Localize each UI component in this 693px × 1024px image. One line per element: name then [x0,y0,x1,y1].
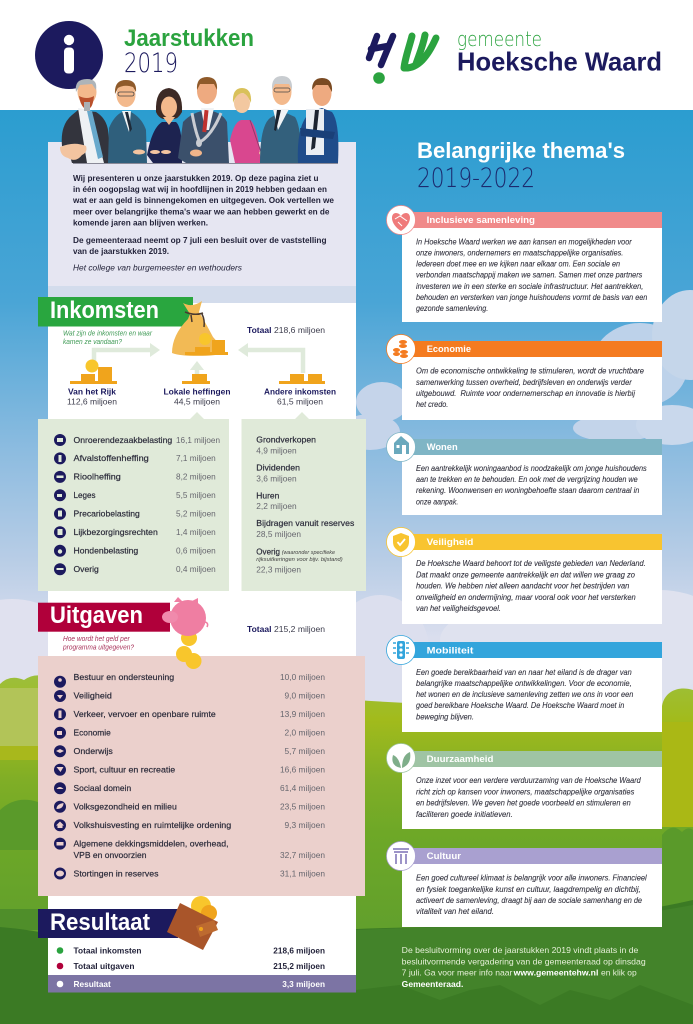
footer note: en klik op [601,968,637,978]
list values: 9,0 miljoen [284,690,325,700]
intro text: in één oogopslag wat wij in hoofdlijnen in 2019 hebben gedaan en [73,184,327,194]
row: totaal uitgaven: 215,2 miljoen [273,961,325,971]
person 7 [298,78,338,163]
intro text: Wij presenteren u onze jaarstukken 2019. Op deze pagina ziet u [73,173,318,183]
list labels: Onroerendezaakbelasting [74,435,173,445]
panel: left white column [48,303,356,992]
card: Cultuur: Cultuur [427,851,461,862]
card: Mobiliteit: belangrijke maatschappelijke ontwikkelingen. Voor de economie, [416,679,632,688]
card: Mobiliteit: Een goede bereikbaarheid van en naar het eiland is de drager van [416,668,632,677]
total expenses: 215,2 miljoen [274,624,325,634]
total income: Totaal [247,325,272,335]
list values: 9,3 miljoen [284,820,325,830]
total expenses [247,624,325,634]
card: Veiligheid: onveiligheid en ondermijning, maar vooral ook voor het versterken [416,593,636,602]
heading: Belangrijke thema's: Belangrijke thema's [417,138,625,163]
list labels: Leges [74,490,96,500]
list labels: Hondenbelasting [74,546,139,556]
list values: 23,5 miljoen [280,802,325,812]
card: Veiligheid: Dat maakt onze gemeente aantrekkelijk en dat willen we graag zo [416,570,636,579]
total expenses: Totaal [247,624,272,634]
row: totaal uitgaven [57,961,325,971]
list values: 2,0 miljoen [284,728,325,738]
person 5 [230,88,269,163]
subheading: Inkomsten question: kamen ze vandaan? [63,337,122,346]
income sources: 61,5 miljoen [277,396,323,406]
icon: column building [386,842,416,870]
card: Cultuur [386,842,662,927]
list icons [54,434,66,575]
list values: 0,6 miljoen [176,546,216,556]
card: Inclusieve samenleving: onze inwoners, ondernemers en maatschappelijke organisaties. [416,248,623,258]
card: Mobiliteit: het wonen en de inclusieve samenleving zetten we ons in voor een [416,690,634,699]
subheading: Uitgaven question [62,634,134,652]
icon: wallet [167,896,218,950]
panel: andere inkomsten: 22,3 miljoen [256,564,301,574]
list labels: Lijkbezorgingsrechten [74,527,158,537]
heading: Resultaat: Resultaat [50,909,150,936]
card: Economie [386,334,662,420]
list values: 13,9 miljoen [280,709,325,719]
hills [0,675,693,1024]
list values: 31,1 miljoen [280,868,325,878]
card: Veiligheid: De Hoeksche Waard behoort tot de veiligste gebieden van Nederland. [416,559,646,568]
list values: 5,2 miljoen [176,509,216,519]
intro text [72,173,334,272]
list labels: Rioolheffing [74,472,121,482]
card: Cultuur: activeert de samenleving, draagt bij aan de sociale samenhang en de [416,896,643,905]
heading: Uitgaven [38,602,170,632]
person 4 [178,77,229,163]
list values: 8,2 miljoen [176,472,216,482]
income sources: Lokale heffingen [164,386,230,396]
subheading: Inkomsten question [63,328,153,346]
sky background [0,110,693,710]
list labels: Overig [74,564,99,574]
list labels: VPB en onvoorzien [74,850,147,860]
card: Inclusieve samenleving: behouden en versterken van jonge huishoudens vormt de basis van een [416,293,648,302]
icon: shield [386,528,416,556]
intro text: komende jaren aan blijven werken. [73,218,208,228]
row: resultaat: Resultaat [74,979,111,989]
card: Wonen: Wonen [427,442,458,453]
heading: Belangrijke thema's [417,138,625,194]
intro text: Het college van burgemeester en wethouders [73,262,242,272]
icon: heart [386,206,416,234]
logo: gemeente Hoeksche Waard [369,27,662,84]
heading: Inkomsten: Inkomsten [50,297,159,324]
income sources: Van het Rijk [68,386,116,396]
footer note: 7 juli. Ga voor meer info naar [402,968,513,978]
income sources: 44,5 miljoen [174,396,220,406]
footer note [402,945,646,989]
card: Mobiliteit: goed bereikbare Hoeksche Waard. De Hoeksche Waard moet in [416,701,625,710]
list labels: Afvalstoffenheffing [74,453,149,463]
list values: 1,4 miljoen [176,527,216,537]
card: Duurzaamheid: richt zich op kansen voor inwoners, maatschappelijke organisaties [416,787,634,796]
person 6 [260,76,302,163]
card: Duurzaamheid: Duurzaamheid [427,754,494,765]
icon: traffic light [386,636,416,664]
list labels: Precariobelasting [74,509,140,519]
list icons [54,676,66,880]
illustration: college members [60,76,338,164]
list labels: Stortingen in reserves [74,868,158,878]
card: Economie: samenwerking tussen overheid, bedrijfsleven en onderwijs verder [416,378,632,387]
card: Wonen: aan te trekken en te behouden. En ook met de vergrijzing houden we [416,475,638,484]
subheading: Uitgaven question: Hoe wordt het geld per [63,634,130,643]
card: Economie: Om de economische ontwikkeling te stimuleren, wordt de vruchtbare [416,366,645,376]
list labels: Algemene dekkingsmiddelen, overhead, [74,839,228,849]
card: Mobiliteit [386,636,662,732]
list labels [74,435,173,574]
card: Economie: Economie [427,344,471,355]
subheading: Inkomsten question: Wat zijn de inkomsten en waar [63,328,153,338]
row: totaal inkomsten: Totaal inkomsten [74,945,142,955]
footer note: Gemeenteraad. [402,979,463,989]
panel: andere inkomsten: Dividenden [256,462,300,472]
card: Inclusieve samenleving: In Hoeksche Waard werken we aan kansen en mogelijkheden voor [416,238,632,246]
result rows [48,945,356,992]
panel: andere inkomsten: 3,6 miljoen [256,473,297,483]
panel: intro [48,142,356,286]
card: Inclusieve samenleving: investeren we in een sterke en sociale infrastructuur. Het aantrekken, [416,282,643,291]
arrows to money bag [94,343,303,376]
footer note: De besluitvorming over de jaarstukken 2019 vindt plaats in de [402,945,639,955]
card: Veiligheid: houden. We hebben niet alleen aandacht voor het bestrijden van [416,582,630,590]
card: Cultuur: vitaliteit van het eiland. [416,907,494,916]
list labels: Economie [74,728,111,738]
list values [176,435,220,574]
list values: 10,0 miljoen [280,672,325,682]
card: Inclusieve samenleving: gezonde samenleving. [416,304,488,313]
card: Inclusieve samenleving: Iedereen doet mee en we kijken naar elkaar om. Een sociale en [416,260,621,268]
panel: andere inkomsten: Overig [256,546,280,556]
card: Economie: uitgebouwd. Ruimte voor ondernemerschap en innovatie is hierbij [416,389,635,398]
row: totaal inkomsten [57,945,325,955]
icon: leaves [386,744,416,772]
intro text: De gemeenteraad neemt op 7 juli een besluit over de vaststelling [73,235,326,245]
footer note: besluitvormende vergadering van de gemeenteraad op dinsdag [402,956,646,966]
card: Cultuur: en fysiek toegankelijke kunst en cultuur, laagdrempelig en dichtbij, [416,885,641,894]
subheading: Uitgaven question: programma uitgegeven? [62,642,134,652]
card: Wonen: Een aantrekkelijk woningaanbod is noodzakelijk om jonge huishoudens [416,464,647,473]
person 3 [147,88,182,163]
coins: Lokale heffingen [182,374,210,384]
panel: andere inkomsten: rijksuitkeringen voor bijv. bijstand) [256,557,343,563]
intro text: van de jaarstukken 2019. [73,246,169,256]
card: Veiligheid: van het veiligheidsgevoel. [416,604,501,613]
card: Veiligheid [386,528,662,624]
list values: 5,5 miljoen [176,490,216,500]
card: Mobiliteit: beweging blijven. [416,712,474,721]
coins: Van het Rijk [70,360,117,384]
list labels: Sociaal domein [74,783,132,793]
card: Duurzaamheid: Onze inzet voor een verdere verduurzaming van de Hoeksche Waard [416,776,641,785]
card: Duurzaamheid: faciliteren goede initiatieven. [416,810,513,819]
card: Economie: het credo. [416,400,448,409]
list values [280,672,325,878]
card: Mobiliteit: Mobiliteit [427,646,474,656]
panel: andere inkomsten: 4,9 miljoen [256,446,297,456]
card: Wonen: rekening. Woonwensen en woningbehoefte staan daarom centraal in [416,486,640,495]
icon: house [386,432,416,462]
row: resultaat: 3,3 miljoen [282,979,325,989]
card: Veiligheid: Veiligheid [427,537,474,548]
list values: 61,4 miljoen [280,783,325,793]
panel: uitgaven list [38,656,365,896]
list labels [74,672,232,878]
row: totaal uitgaven: Totaal uitgaven [74,961,134,971]
panel: andere inkomsten: 28,5 miljoen [256,529,301,539]
income sources: 112,6 miljoen [67,396,117,406]
title: Jaarstukken 2019 [124,25,254,79]
card: Cultuur: Een goed cultureel klimaat is belangrijk voor alle inwoners. Financieel [416,874,647,882]
intro text: wat er aan geld is binnengekomen en uitgegeven. Ook vertellen we [72,195,334,205]
list labels: Volksgezondheid en milieu [74,802,177,812]
card: Inclusieve samenleving: verbonden maatschappij maken we samen. Samen met onze partners [416,270,642,280]
list values: 0,4 miljoen [176,564,216,574]
title: Jaarstukken 2019: 2019 [124,48,178,79]
list values: 16,1 miljoen [176,435,220,445]
list labels: Veiligheid [74,690,112,700]
panel: andere inkomsten: Huren [256,490,280,500]
card: Inclusieve samenleving [386,206,662,322]
coin stacks [70,360,325,384]
heading: Uitgaven: Uitgaven [50,602,143,629]
card: Wonen [386,432,662,515]
icon: piggy bank with coins [162,597,208,669]
logo: gemeente Hoeksche Waard: gemeente [457,27,542,51]
header background [0,0,693,110]
panel: lokale heffingen [38,412,229,591]
icon: money bag with coins [172,301,228,356]
person 1 [60,79,112,163]
icon: info circle [35,21,103,89]
row: resultaat [48,975,356,992]
card: Inclusieve samenleving: Inclusieve samenleving [427,215,535,226]
panel: andere inkomsten: Bijdragen vanuit reserves [256,518,354,528]
total income: 218,6 miljoen [274,325,325,335]
row: totaal inkomsten: 218,6 miljoen [273,945,325,955]
panel: andere inkomsten [242,412,366,591]
list labels: Volkshuisvesting en ruimtelijke ordening [74,820,232,830]
card: Duurzaamheid [386,744,662,829]
panel: andere inkomsten: (waaronder specifieke [282,550,335,556]
person 2 [108,80,147,163]
list labels: Bestuur en ondersteuning [74,672,175,682]
income sources: Andere inkomsten [264,386,336,396]
heading: Belangrijke thema's: 2019-2022 [417,163,535,194]
panel: andere inkomsten: Grondverkopen [256,434,316,444]
list values: 5,7 miljoen [284,746,325,756]
list labels: Onderwijs [74,746,113,756]
list labels: Sport, cultuur en recreatie [74,764,176,774]
total income [247,325,325,335]
list values: 32,7 miljoen [280,850,325,860]
clouds [0,286,693,715]
list labels: Verkeer, vervoer en openbare ruimte [74,709,216,719]
card: Wonen: onze aanpak. [416,497,458,506]
list values: 16,6 miljoen [280,764,325,774]
coins: Andere inkomsten [279,374,325,384]
income sources [67,386,336,406]
logo: gemeente Hoeksche Waard: Hoeksche Waard [457,46,662,76]
footer note: www.gemeentehw.nl [513,968,598,978]
card: Duurzaamheid: en bedrijfsleven. We geven het goede voorbeeld en stimuleren en [416,798,631,807]
intro text: meer over belangrijke thema's waar we aan hebben gewerkt en de [73,206,330,216]
panel: andere inkomsten: 2,2 miljoen [256,501,297,511]
title: Jaarstukken 2019: Jaarstukken [124,25,254,52]
list values: 7,1 miljoen [176,453,216,463]
icon: coins [386,334,416,364]
